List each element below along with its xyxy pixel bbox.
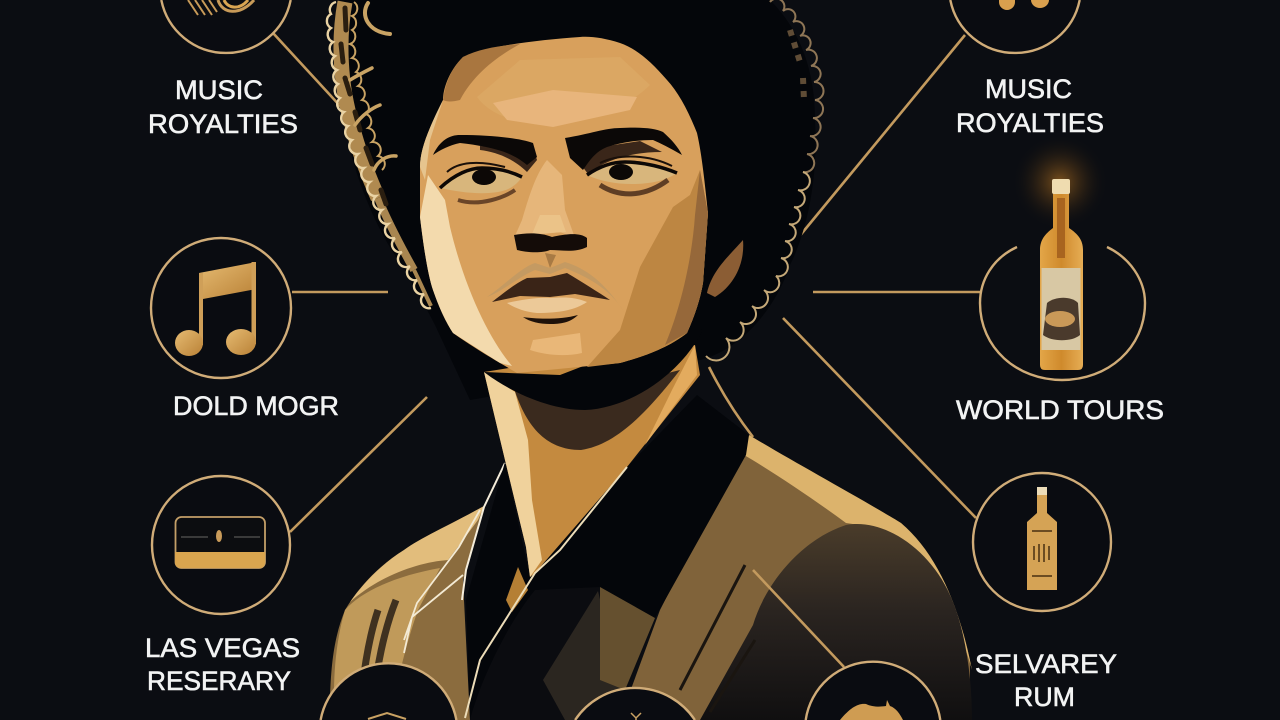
line to bottom right node [753,570,844,667]
icon: gold house [840,700,903,720]
music note node left [151,238,339,421]
amber chest sliver [506,567,528,612]
left shoulder [330,506,484,720]
brow shadows [480,146,537,172]
las vegas node left: RESERARY [147,666,291,696]
music royalties node top left [148,0,298,139]
las vegas node left [145,476,300,696]
bottle glow [1012,134,1108,230]
selvarey rum node right [973,473,1117,712]
music royalties node top left: ROYALTIES [148,109,298,139]
collar and lower torso [470,587,655,720]
mouth [487,262,624,355]
music royalties node top right [950,0,1104,138]
label: MUSIC [175,75,263,105]
icon: music note [175,262,256,356]
face shading [443,44,520,102]
icon: music note heads [999,0,1049,10]
icon: liquor bottle [1040,179,1083,370]
icon: small mark [631,713,641,720]
icon: rum bottle [1027,487,1057,590]
label: DOLD MOGR [173,391,339,421]
bottom right node [806,662,940,720]
icon: gold card [175,517,265,568]
neck [484,345,700,577]
jacket arm [700,524,972,720]
ear [707,240,743,297]
eyebrows [433,135,537,165]
connector lines [273,33,980,532]
selvarey rum node right: RUM [1014,682,1075,712]
right eye [587,157,677,194]
label: WORLD TOURS [956,395,1164,425]
icon: chevron [368,713,406,719]
label: SELVAREY [975,649,1117,679]
portrait illustration [327,0,972,720]
left hair crescents [350,3,396,170]
right shoulder and jacket [627,435,970,720]
open ring [980,247,1145,380]
label: MUSIC [985,74,1072,104]
icon: vinyl record [188,0,254,15]
nose [514,160,587,268]
right hair curls [706,0,824,360]
hair [334,0,816,400]
left eye [440,163,522,202]
bottom left node [321,663,456,720]
music royalties node top right: ROYALTIES [956,108,1104,138]
world tours node right [956,134,1164,425]
left hair curls [327,2,431,308]
dark shirt [466,395,749,720]
bottom middle node [575,688,695,720]
face [420,37,708,373]
label: LAS VEGAS [145,633,300,663]
shirt edge line [465,467,627,718]
